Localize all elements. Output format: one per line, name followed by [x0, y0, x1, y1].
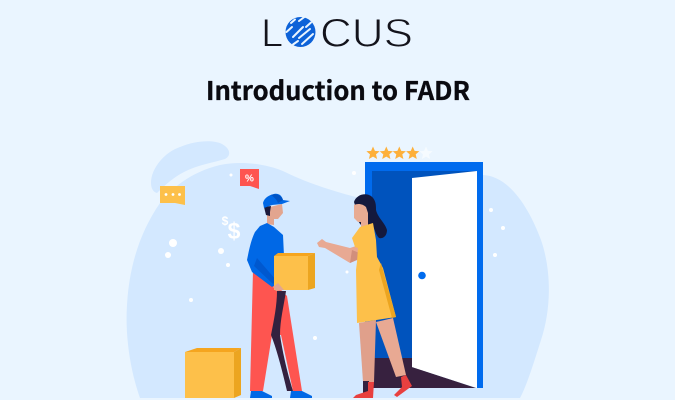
hand	[273, 283, 284, 291]
cap	[263, 194, 290, 208]
dress fold	[379, 263, 396, 318]
face and neck	[354, 204, 368, 230]
sleeve shadow	[254, 258, 276, 284]
icon: dollar signs	[222, 214, 241, 244]
cap shade	[271, 194, 283, 203]
icon: dollar signs: $	[228, 218, 241, 244]
rating stars	[366, 146, 433, 159]
door knob	[418, 272, 426, 279]
sweater	[247, 223, 284, 287]
icon: dollar signs: $	[222, 214, 229, 228]
trousers	[250, 270, 302, 391]
right shoe	[394, 375, 412, 397]
shoes	[250, 391, 272, 398]
front leg	[376, 318, 406, 377]
logo: Locus	[261, 12, 413, 56]
door	[365, 162, 483, 388]
left shoe	[353, 381, 374, 398]
title: Introduction to FADR	[206, 71, 470, 108]
floor shadow	[373, 358, 476, 388]
delivery man	[247, 194, 315, 398]
neck and face	[267, 204, 283, 225]
logo: Locus: CUS	[320, 12, 413, 56]
trouser shadow	[271, 291, 293, 391]
carried box	[274, 253, 315, 290]
decorative white dots	[165, 171, 505, 340]
sleeve shadow on arm	[350, 250, 362, 263]
door leaf	[412, 171, 477, 388]
back leg	[359, 320, 376, 382]
door frame	[365, 162, 483, 388]
floor box	[185, 348, 241, 398]
illustration: delivery scene	[127, 141, 549, 398]
dress	[352, 223, 396, 323]
logo: Locus: L	[261, 12, 283, 56]
icon: chat bubble	[160, 186, 185, 205]
customer woman	[317, 194, 412, 398]
icon: percent tag: %	[245, 174, 254, 184]
hair	[264, 206, 271, 216]
hair	[354, 194, 387, 238]
door opening	[372, 171, 477, 358]
background blob: small swoosh	[151, 141, 229, 193]
background blob: main	[127, 163, 549, 398]
icon: percent tag	[240, 169, 259, 189]
arm	[317, 239, 365, 263]
